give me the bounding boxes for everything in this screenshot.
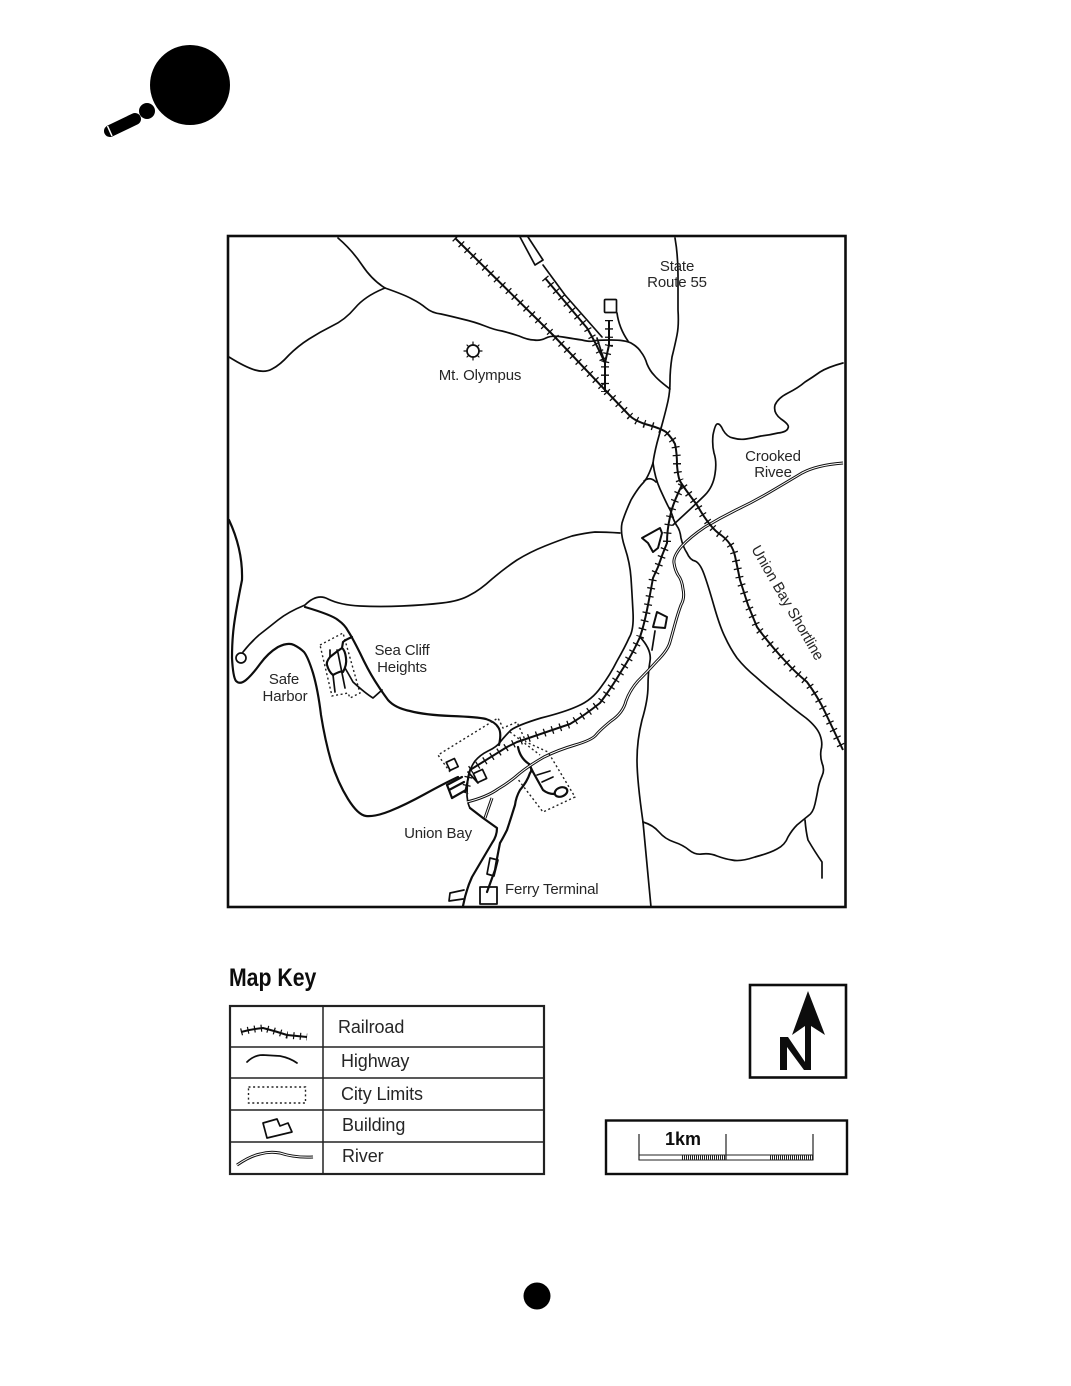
label: Crooked Rivee: Rivee xyxy=(754,464,792,481)
buildings xyxy=(446,237,667,904)
icon: north arrow xyxy=(780,991,825,1070)
icon: magnifying glass xyxy=(108,45,230,136)
heading: Map Key: Map Key xyxy=(229,963,316,991)
label: Crooked Rivee: Crooked xyxy=(745,448,801,465)
key table xyxy=(230,1006,544,1174)
railroads xyxy=(455,238,843,793)
icon: railroad xyxy=(241,1028,307,1037)
label: 1km: 1km xyxy=(665,1129,701,1149)
highways xyxy=(229,238,843,907)
panel: map xyxy=(228,236,846,907)
city limits xyxy=(320,633,575,812)
label: City Limits: City Limits xyxy=(341,1084,423,1104)
town streets xyxy=(327,637,553,798)
label: River: River xyxy=(342,1146,384,1166)
icon: building xyxy=(263,1119,292,1138)
label: Union Bay: Union Bay xyxy=(404,825,473,842)
label: Ferry Terminal: Ferry Terminal xyxy=(505,881,598,898)
label: Mt. Olympus: Mt. Olympus xyxy=(439,367,521,384)
label: Sea Cliff Heights: Heights xyxy=(377,659,427,676)
icon: city limits xyxy=(248,1087,306,1103)
icon: river xyxy=(237,1152,313,1165)
icon: mountain peak xyxy=(464,342,482,360)
map frame xyxy=(228,236,846,907)
label: State Route 55: Route 55 xyxy=(647,274,707,291)
panel: map key xyxy=(229,963,544,1174)
icon: highway xyxy=(247,1055,297,1063)
north arrow box xyxy=(750,985,846,1078)
label: Building: Building xyxy=(342,1115,405,1135)
scale bar xyxy=(606,1120,847,1174)
page number circle xyxy=(524,1282,550,1310)
label: Union Bay Shortline: Union Bay Shortline xyxy=(748,542,827,663)
label: State Route 55: State xyxy=(660,258,694,275)
label: Highway: Highway xyxy=(341,1051,409,1071)
river xyxy=(467,463,843,818)
label: Safe Harbor: Safe xyxy=(269,671,299,688)
label: Sea Cliff Heights: Sea Cliff xyxy=(374,642,431,659)
label: Railroad: Railroad xyxy=(338,1017,404,1037)
label: Safe Harbor: Harbor xyxy=(263,688,308,705)
